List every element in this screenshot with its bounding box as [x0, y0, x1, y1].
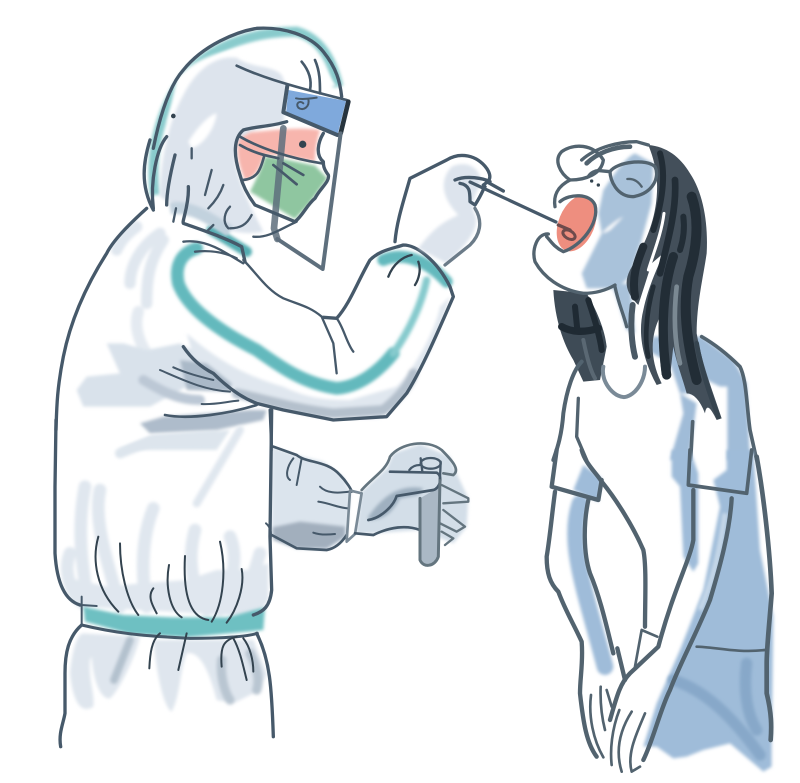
hand wash: [356, 444, 468, 543]
lines: [547, 450, 772, 772]
health worker: torso and raised arm: [56, 208, 453, 450]
test tube: [420, 478, 440, 565]
glove: [362, 443, 456, 490]
skin shadow: [582, 153, 750, 460]
head lines: [144, 28, 503, 269]
torso washes: [77, 227, 450, 450]
hair strands: [631, 153, 718, 417]
teal arm band: [177, 230, 447, 388]
face skin: [238, 129, 320, 180]
hood wash: [160, 57, 287, 233]
lower arm sleeve: [272, 447, 351, 550]
eye: [299, 141, 306, 148]
head: hood, visor, face and mask; raised glove: [144, 28, 503, 269]
swab stick: [470, 182, 556, 222]
left hair: [553, 290, 607, 382]
visor band: [286, 90, 346, 136]
surgical mask: [250, 157, 327, 219]
test tube fill: [420, 487, 440, 565]
left hair strands: [562, 300, 602, 378]
right hair mass: [627, 145, 722, 420]
nostrils: [590, 179, 593, 183]
raised glove outline: [395, 155, 490, 242]
health worker: lower gown, belt and hand holding test tube: [55, 410, 468, 747]
arm and chest lines: [56, 208, 453, 450]
sleeve: [272, 447, 352, 550]
blue washes: [573, 450, 773, 772]
shoulder wash: [647, 337, 750, 460]
collar: [170, 208, 230, 232]
visor logo: [296, 98, 317, 109]
gown washes: [63, 430, 268, 712]
mouth: [549, 189, 604, 257]
face and body lines: [534, 142, 757, 460]
glove wash: [418, 164, 481, 263]
belt: [83, 607, 265, 637]
patient: head, hair and shoulders: [534, 142, 757, 460]
hood teal edge: [153, 32, 338, 195]
patient: torso, arms and hands: [547, 450, 773, 772]
gown lines: [55, 410, 468, 747]
